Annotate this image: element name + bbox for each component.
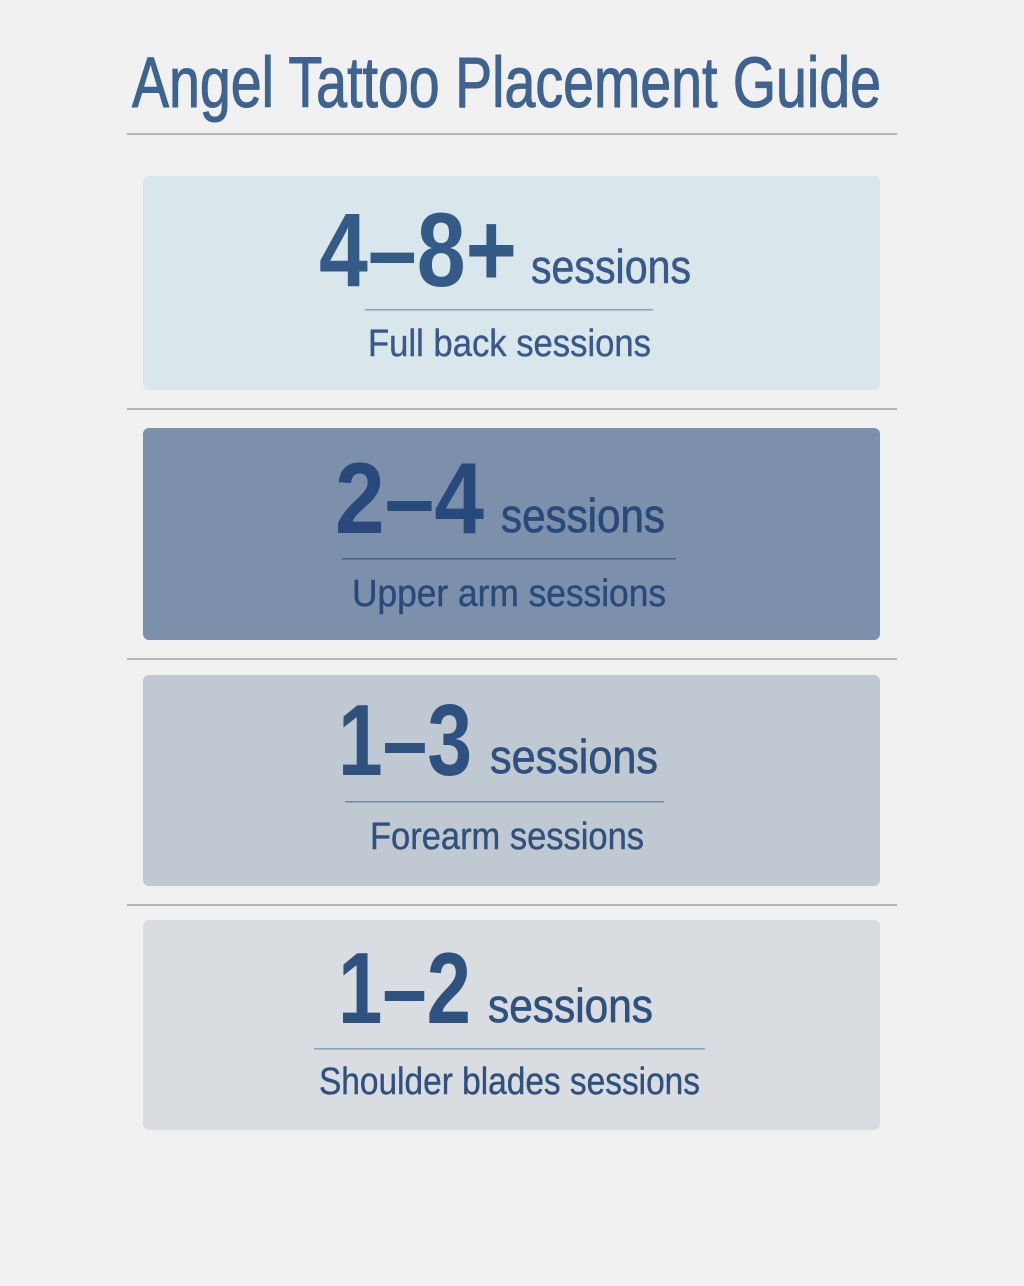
stat: 1–3 sessions: 1–3 — [338, 685, 472, 797]
panel: full back — [143, 176, 880, 390]
stat: 1–3 sessions — [338, 685, 658, 797]
stat: 4–8+ sessions: sessions — [531, 240, 691, 293]
stat: 2–4 sessions: sessions — [501, 489, 665, 542]
label: shoulder blades: Shoulder blades sessions — [319, 1061, 700, 1103]
stat: 1–2 sessions — [338, 933, 653, 1045]
stat: 4–8+ sessions — [319, 192, 691, 309]
stat: 1–2 sessions: 1–2 — [338, 933, 471, 1045]
stat: 2–4 sessions — [335, 443, 665, 555]
panel: upper arm — [143, 428, 880, 640]
label: forearm: Forearm sessions — [370, 816, 644, 858]
panel: forearm — [143, 675, 880, 886]
stat: 4–8+ sessions: 4–8+ — [319, 192, 517, 309]
label: full back: Full back sessions — [368, 323, 651, 365]
panel: shoulder blades — [143, 920, 880, 1130]
stat: 1–3 sessions: sessions — [490, 730, 658, 783]
stat: 1–2 sessions: sessions — [488, 979, 653, 1032]
stat: 2–4 sessions: 2–4 — [335, 443, 484, 555]
label: upper arm: Upper arm sessions — [352, 573, 666, 615]
